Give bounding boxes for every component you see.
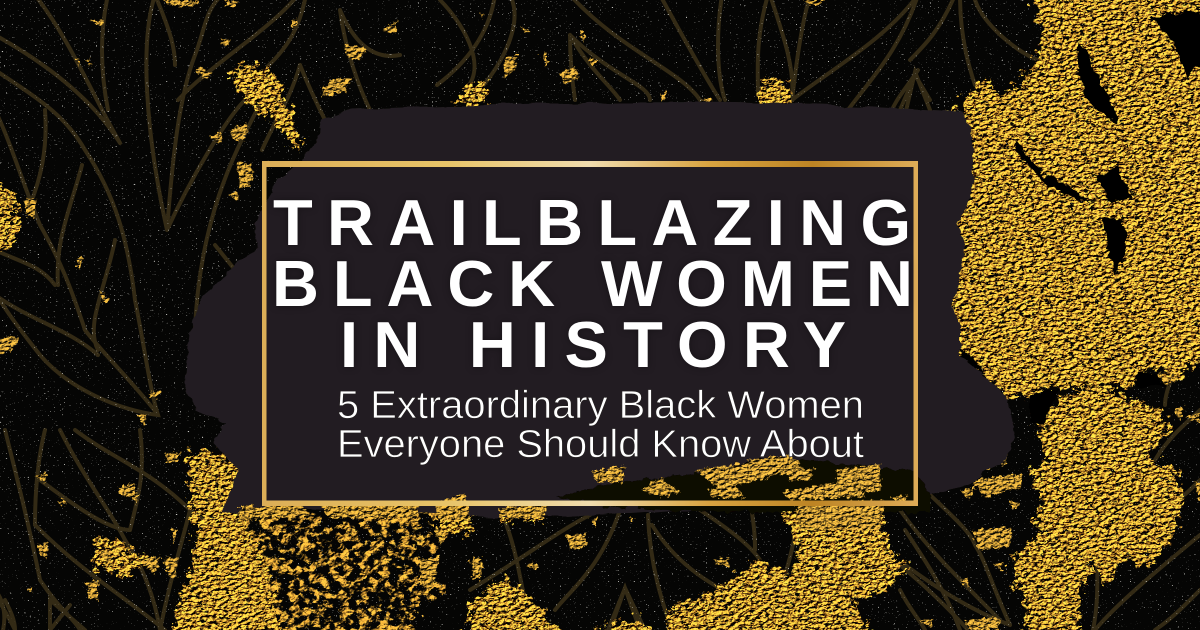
dark brush stroke panel bbox=[185, 102, 1015, 517]
subtitle: Everyone Should Know About bbox=[337, 423, 864, 466]
dark tear exposing background bbox=[555, 458, 930, 512]
gold leaf sparse patches bbox=[205, 505, 448, 630]
gold: large right mass lower bbox=[1010, 385, 1185, 630]
gold overlay on lower edge of panel bbox=[240, 455, 908, 530]
title bbox=[272, 186, 913, 381]
title: TRAILBLAZING bbox=[273, 186, 911, 259]
gold: lower centre mass bbox=[665, 510, 905, 630]
subtitle: 5 Extraordinary Black Women bbox=[337, 384, 864, 427]
gold rectangular frame bbox=[262, 161, 918, 506]
flecks: lower left bbox=[28, 452, 180, 600]
title: BLACK WOMEN bbox=[272, 247, 913, 320]
gold: left side cluster bbox=[95, 538, 152, 577]
gold: streaks on tear bbox=[592, 455, 882, 500]
flecks: right side bbox=[953, 372, 1200, 630]
gold: left bottom edge bbox=[175, 450, 280, 630]
gold: comet bbox=[230, 63, 300, 157]
flecks: upper left bbox=[0, 0, 398, 427]
gold: top centre pieces bbox=[453, 78, 792, 107]
gold: large right mass upper bbox=[945, 0, 1200, 397]
gold: pieces crossing frame base bbox=[240, 493, 908, 530]
flecks: lower centre bbox=[420, 515, 730, 590]
panel: headline text bbox=[272, 186, 913, 466]
black cracks in gold bbox=[960, 10, 1200, 425]
gold: lower left and centre pieces bbox=[437, 505, 655, 630]
title: IN HISTORY bbox=[340, 308, 846, 381]
flecks: lower right bbox=[920, 488, 1020, 628]
subtitle bbox=[337, 384, 864, 466]
gold: left edge blob bbox=[0, 178, 17, 255]
flecks: top centre bbox=[480, 0, 827, 104]
